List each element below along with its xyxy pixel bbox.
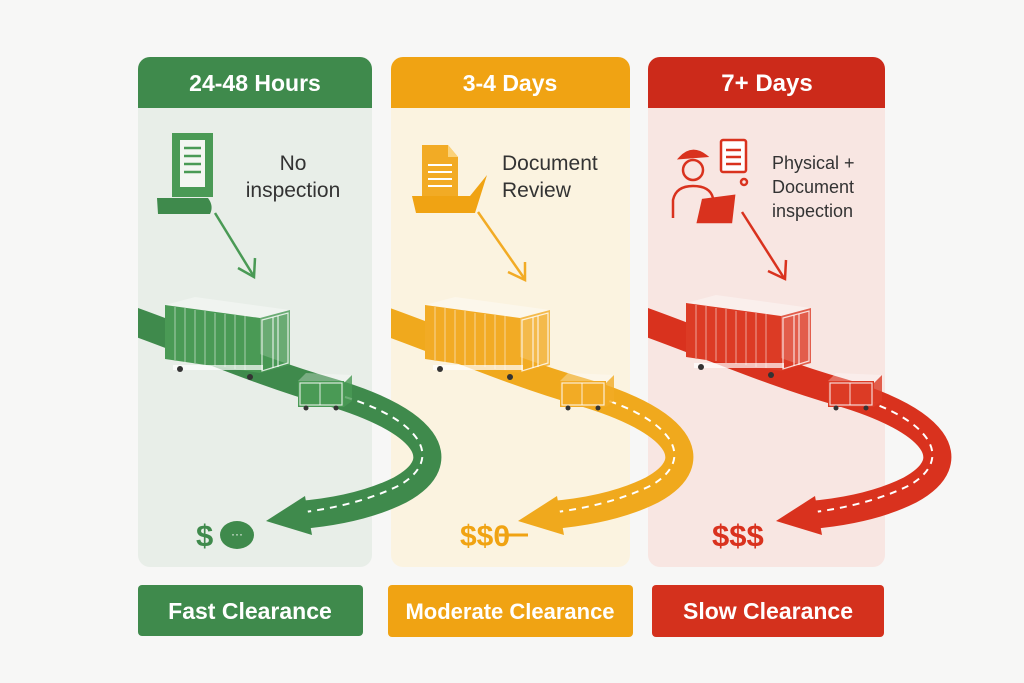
arrow: orange	[478, 212, 525, 280]
cost: green	[196, 518, 254, 553]
road: green	[130, 320, 427, 535]
text: Document Review: Review	[502, 179, 572, 202]
icon: inspector	[673, 140, 747, 222]
text: Physical + Document inspection: Physical +	[772, 153, 855, 173]
heading: 7+ Days: 7+ Days	[721, 70, 813, 97]
heading: 24-48 Hours	[138, 57, 372, 108]
road: red	[640, 320, 937, 535]
cost: orange: $$0	[460, 520, 510, 553]
text: Document Review: Document	[502, 152, 598, 175]
panel: red	[648, 57, 885, 567]
heading: 3-4 Days	[391, 57, 630, 108]
icon: green document	[157, 133, 213, 214]
button: Fast Clearance: Fast Clearance	[168, 598, 332, 624]
heading: 3-4 Days: 3-4 Days	[463, 70, 557, 96]
container: red	[686, 295, 811, 378]
arrow: red	[742, 212, 786, 279]
text: Document Review	[502, 152, 598, 202]
text: Physical + Document inspection: Document	[772, 177, 854, 197]
button: Moderate Clearance: Moderate Clearance	[405, 599, 615, 624]
text: No inspection: inspection	[246, 179, 340, 202]
button: Moderate Clearance	[388, 585, 633, 637]
button: Fast Clearance	[138, 585, 363, 636]
button: Slow Clearance: Slow Clearance	[683, 598, 853, 624]
text: Physical + Document inspection: inspection	[772, 201, 853, 221]
cost: green: $	[196, 518, 213, 553]
cost: green: ···	[231, 527, 243, 541]
button: Slow Clearance	[652, 585, 884, 637]
cost: red: $$$	[712, 518, 764, 553]
container: orange	[425, 297, 550, 380]
text: No inspection	[246, 152, 340, 202]
truck: red	[828, 373, 882, 410]
panel: green	[138, 57, 372, 567]
heading: 7+ Days	[648, 57, 885, 108]
panel: orange	[391, 57, 630, 567]
arrow: green	[215, 213, 255, 277]
container: green	[165, 297, 290, 380]
truck: orange	[560, 373, 614, 410]
truck: green	[298, 373, 352, 410]
icon: orange document	[412, 145, 487, 213]
road: orange	[382, 320, 679, 535]
text: No inspection: No	[280, 152, 306, 175]
heading: 24-48 Hours: 24-48 Hours	[189, 70, 321, 96]
text: Physical + Document inspection	[772, 153, 855, 221]
